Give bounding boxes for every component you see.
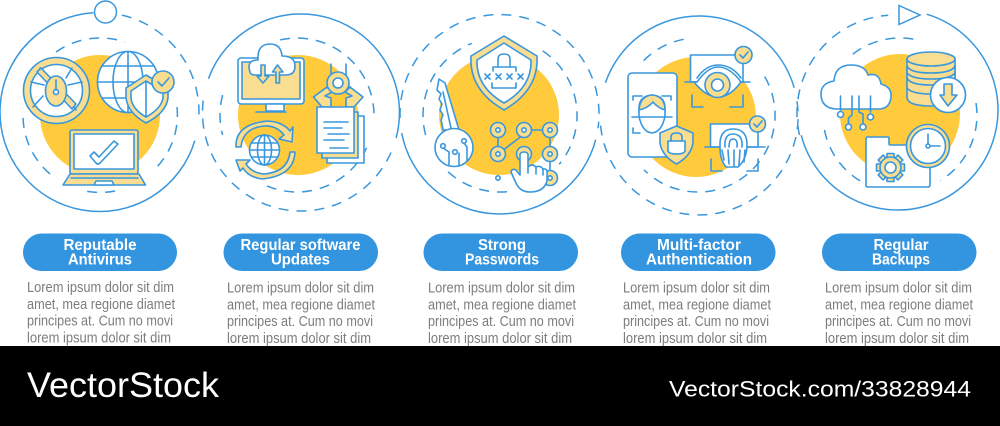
body text 3: Lorem ipsum dolor sit dim <box>428 280 575 296</box>
heading pill: reputable antivirus: Antivirus <box>68 252 132 268</box>
yellow disc 4 <box>636 57 756 177</box>
icon: pattern lock with hand <box>490 122 558 192</box>
panel: regular software updates diagram <box>202 14 399 211</box>
heading pill: regular software updates: Updates <box>271 252 330 268</box>
icon: clock <box>906 124 950 168</box>
icon: bug prohibited <box>24 58 90 124</box>
outer ring 3 <box>400 15 599 214</box>
heading pill: reputable antivirus <box>23 234 177 271</box>
start triangle marker <box>899 6 920 24</box>
heading pill: reputable antivirus: Reputable <box>64 237 137 254</box>
heading pill: multi-factor authentication <box>621 234 776 271</box>
icon: globe with shield <box>98 52 174 123</box>
yellow disc 2 <box>238 55 358 175</box>
body text 1: Lorem ipsum dolor sit dim <box>27 280 174 296</box>
body text 4 <box>623 280 771 347</box>
body text 2: Lorem ipsum dolor sit dim <box>227 280 374 296</box>
image id url: VectorStock.com/33828944 <box>669 376 971 402</box>
start marker circle <box>94 1 116 23</box>
outer ring 1 <box>0 13 199 212</box>
column: regular software updates <box>224 234 378 347</box>
body text 4: principes at. Cum no movi <box>623 314 769 330</box>
icon: shield with padlock <box>660 126 693 164</box>
icon: database with download <box>907 52 966 112</box>
outer ring 2 <box>202 14 399 211</box>
heading pill: regular backups <box>822 234 976 271</box>
icon: robot arm with documents <box>314 64 364 163</box>
logo wordmark: VectorStock <box>27 366 220 405</box>
heading pill: multi-factor authentication: Multi-factor <box>657 237 741 254</box>
watermark footer bar <box>0 346 1000 426</box>
outer ring 4 <box>600 16 798 215</box>
heading pill: regular backups: Regular <box>874 237 928 254</box>
heading pill: regular software updates: Regular software <box>240 237 361 254</box>
body text 3 <box>428 280 576 347</box>
icon: laptop with check <box>63 130 146 185</box>
body text 3: amet, mea regione diamet <box>428 298 576 314</box>
outer ring 5 <box>797 14 998 210</box>
body text 2 <box>227 280 375 347</box>
icon: folder with gear <box>866 137 930 187</box>
yellow disc 5 <box>840 54 960 174</box>
inner dashed ring 4 <box>644 38 775 192</box>
inner dashed ring 2 <box>220 38 374 192</box>
yellow disc 3 <box>439 55 559 175</box>
icon: globe with circular arrows <box>236 121 295 179</box>
body text 4: Lorem ipsum dolor sit dim <box>623 280 770 296</box>
heading pill: strong passwords <box>424 234 578 271</box>
body text 5: principes at. Cum no movi <box>825 314 971 330</box>
inner dashed ring 1 <box>23 38 177 192</box>
body text 4: lorem ipsum dolor sit dim <box>623 331 767 347</box>
column: multi-factor authentication <box>621 234 776 347</box>
body text 2: lorem ipsum dolor sit dim <box>227 331 371 347</box>
body text 1: lorem ipsum dolor sit dim <box>27 330 171 346</box>
body text 5: lorem ipsum dolor sit dim <box>825 331 969 347</box>
heading pill: strong passwords: Strong <box>478 237 526 254</box>
body text 2: amet, mea regione diamet <box>227 298 375 314</box>
panel: strong passwords diagram <box>400 15 599 214</box>
body text 4: amet, mea regione diamet <box>623 298 771 314</box>
panel: multi-factor authentication diagram <box>600 16 798 215</box>
icon: fingerprint scan with check <box>705 116 766 171</box>
body text 3: lorem ipsum dolor sit dim <box>428 331 572 347</box>
icon: shield with lock <box>471 36 537 110</box>
heading pill: multi-factor authentication: Authentication <box>646 252 752 268</box>
inner dashed ring 5 <box>823 38 977 181</box>
icon: monitor with cloud <box>238 44 304 112</box>
heading pill: strong passwords: Passwords <box>465 252 539 268</box>
heading pill: regular software updates <box>224 234 378 271</box>
body text 5 <box>825 280 973 347</box>
column: regular backups <box>822 234 976 347</box>
icon: phone face scan <box>628 73 677 157</box>
body text 5: Lorem ipsum dolor sit dim <box>825 280 972 296</box>
heading pill: regular backups: Backups <box>872 252 930 268</box>
icon: key <box>435 79 473 166</box>
panel: reputable antivirus diagram <box>0 1 199 212</box>
column: strong passwords <box>424 234 578 347</box>
body text 1: principes at. Cum no movi <box>27 314 173 330</box>
yellow disc 1 <box>40 55 160 175</box>
inner dashed ring 3 <box>423 43 577 192</box>
icon: cloud with circuits <box>821 65 891 130</box>
body text 5: amet, mea regione diamet <box>825 298 973 314</box>
panel: regular backups diagram <box>797 6 998 210</box>
column: reputable antivirus <box>23 234 177 346</box>
body text 2: principes at. Cum no movi <box>227 314 373 330</box>
body text 1: amet, mea regione diamet <box>27 297 175 313</box>
icon: eye scan with check <box>685 46 752 107</box>
body text 1 <box>27 280 175 346</box>
body text 3: principes at. Cum no movi <box>428 314 574 330</box>
